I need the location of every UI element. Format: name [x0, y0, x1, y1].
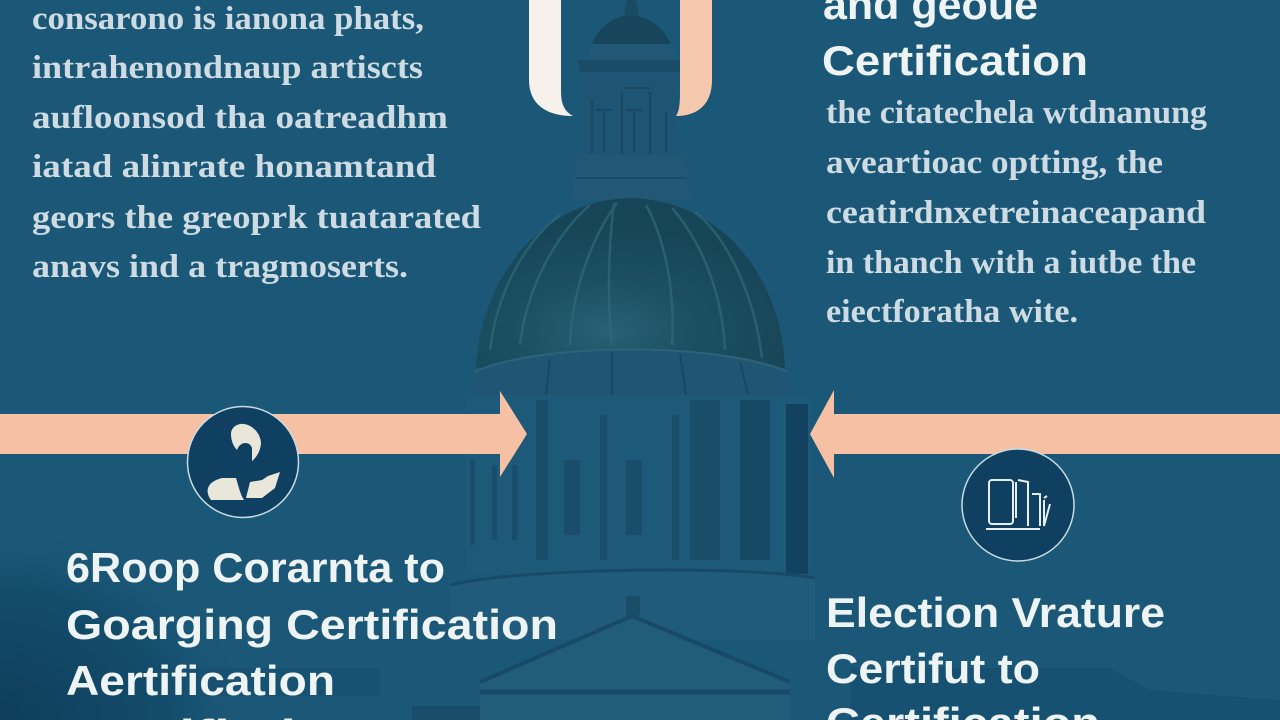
icon: person in circle [188, 406, 298, 518]
icon: documents in circle [962, 449, 1074, 561]
dark band behind right heading [850, 668, 1280, 720]
text block: top right paragraph: ceatirdnxetreinaceapand [826, 195, 1206, 231]
lantern ring [572, 154, 690, 200]
heading: top right: Certification [822, 37, 1088, 84]
cupola [591, 15, 672, 50]
drum [466, 395, 810, 575]
dome [476, 198, 785, 368]
text block: top left paragraph: iatad alinrate honamtand [32, 149, 436, 185]
text block: top left paragraph: anavs ind a tragmoserts. [32, 249, 408, 285]
dark band behind left heading [150, 668, 380, 696]
text block: top right paragraph: aveartioac optting, the [826, 145, 1163, 181]
pediment [480, 616, 790, 720]
text block: top right paragraph: in thanch with a iutbe the [826, 245, 1196, 281]
arrow: left pointing right [0, 391, 527, 477]
lantern [580, 66, 680, 158]
left bracket shape [529, 0, 573, 116]
heading: bottom left: Goarging Certification [66, 601, 558, 648]
text block: top left paragraph: consarono is ianona phats, [32, 1, 424, 37]
heading: bottom right: Election Vrature [826, 589, 1165, 636]
heading: bottom right: Certifut to [826, 645, 1040, 692]
right bracket shape [676, 0, 712, 116]
arrow: right pointing left [810, 390, 1280, 478]
text block: top left paragraph: intrahenondnaup artiscts [32, 50, 423, 86]
heading: bottom right [826, 589, 1165, 720]
drum base [450, 570, 815, 640]
heading: bottom left [66, 544, 558, 720]
capitol building illustration [412, 0, 815, 720]
text block: top right paragraph: eiectforatha wite. [826, 294, 1078, 330]
dome base [472, 350, 792, 400]
text block: top right paragraph [826, 95, 1208, 330]
heading: bottom left: Aertification [66, 657, 335, 704]
text block: top left paragraph: geors the greoprk tuatarated [32, 200, 481, 236]
text block: top left paragraph [32, 1, 481, 285]
text block: top right paragraph: the citatechela wtdnanung [826, 95, 1208, 131]
heading: bottom left: 6Roop Corarnta to [66, 544, 445, 591]
heading: top right [822, 0, 1088, 84]
text block: top left paragraph: aufloonsod tha oatreadhm [32, 100, 448, 136]
dark trees bottom left [0, 520, 260, 720]
